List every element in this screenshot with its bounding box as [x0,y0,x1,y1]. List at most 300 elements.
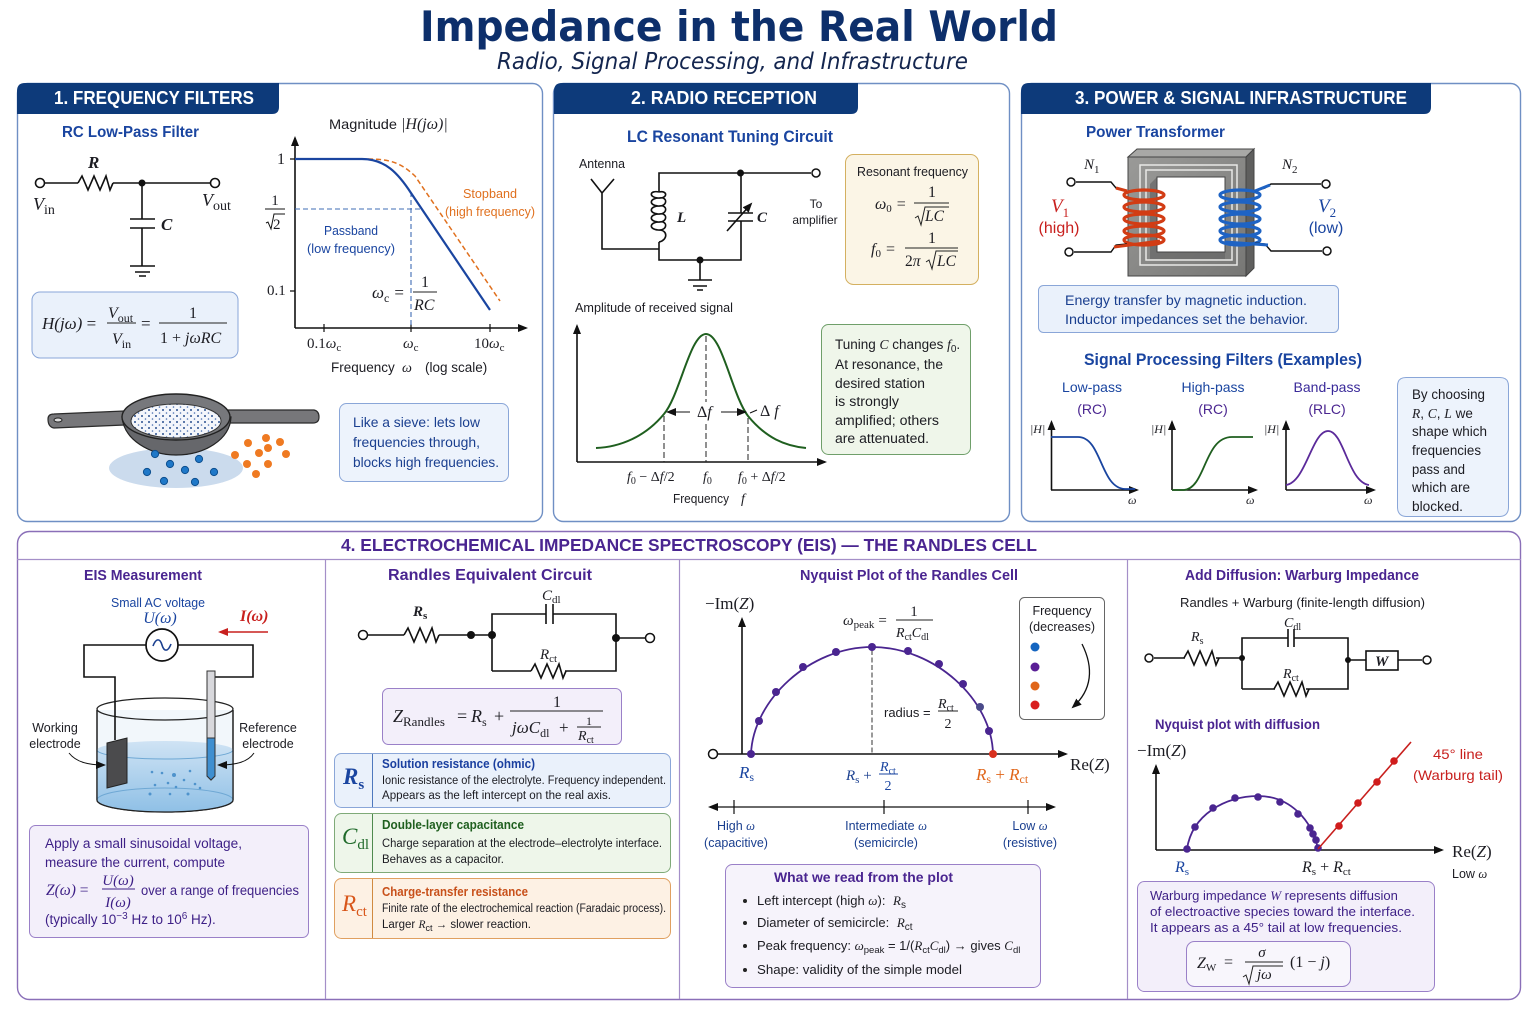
callout: tuning: desired station [835,376,925,391]
chart: Nyquist: s [986,772,991,786]
frequency axis annotation: High ω [717,819,755,833]
LC tuning circuit: L [676,210,686,226]
legend: frequency: Frequency [1032,604,1092,618]
diagram: electrochemical cell: electrode [29,737,81,751]
legend: frequency [1020,598,1104,720]
bode magnitude chart: 0.1 [267,283,286,299]
bode magnitude chart: c [414,342,419,354]
Randles plus Warburg circuit: s [1200,636,1204,647]
heading: EIS: 4. ELECTROCHEMICAL IMPEDANCE SPECTROSCOPY (EIS) — THE RANDLES CELL [341,535,1037,555]
RC circuit: C [161,215,173,234]
icon: transformer: 1 [1094,164,1100,176]
bode magnitude chart: RC [413,297,435,314]
chart: Nyquist: R [938,697,947,712]
callout: what we read from the plot: Shape: validity of the simple model [757,962,962,977]
bode magnitude chart: c [384,291,389,305]
diagram: electrochemical cell: U(ω) [143,610,177,627]
callout: what we read from the plot: peak [864,945,885,956]
callout: choosing R, C, L: By choosing [1412,387,1485,402]
formula: Z Randles: Randles [403,714,445,729]
diagram: electrochemical cell: Reference [239,721,297,735]
frequency axis annotation: Low ω [1012,819,1048,833]
chart: high-pass: |H| [1151,422,1166,436]
heading: signal processing filters: Signal Processing Filters (Examples) [1084,350,1362,369]
chart: Nyquist: −Im(Z) [705,594,754,613]
chart: Nyquist: s [749,770,754,784]
resonance chart: f [627,470,631,485]
icon: transformer: 2 [1330,205,1336,220]
callout: choosing R, C, L: frequencies [1412,443,1481,458]
card: charge-transfer resistance: ct [356,904,368,920]
bode magnitude chart: = [394,283,404,302]
diagram: electrochemical cell: electrode [242,737,294,751]
card: double-layer capacitance: Behaves as a capacitor. [382,854,504,866]
chart: Nyquist with diffusion: 45° line [1433,746,1483,762]
callout: EIS procedure: −3 [116,911,128,922]
Randles plus Warburg circuit: W [1375,654,1390,670]
callout: what we read from the plot: R [913,938,922,953]
callout: EIS procedure: measure the current, compute [45,855,225,870]
formula box: resonant frequency: 0 [875,248,881,260]
card: double-layer capacitance [334,814,670,872]
chart: Nyquist: s [855,774,859,786]
chart: Nyquist: radius = [884,705,931,720]
callout: choosing R, C, L: which are [1411,480,1470,495]
bode magnitude chart: c [336,342,341,354]
callout: EIS procedure: Z(ω) = [46,882,89,899]
bode magnitude chart: (low frequency) [307,241,395,256]
icon: transformer: (low) [1309,220,1343,237]
chart: Nyquist: 2 [884,779,892,794]
callout: choosing R, C, L [1398,378,1508,516]
formula box: resonant frequency: = [886,241,895,258]
callout: tuning: At resonance, the [835,357,943,372]
Randles plus Warburg circuit: ct [1292,673,1299,684]
formula: Warburg: W [1206,962,1217,974]
formula: Z Randles: 1 [553,694,561,711]
callout: tuning: are attenuated. [835,431,929,446]
callout: EIS procedure: over a range of frequencies [141,883,299,898]
resonance chart: f/2 [660,470,675,485]
diagram: electrochemical cell: Small AC voltage [111,596,205,610]
formula: Warburg [1186,942,1350,986]
chart: low-pass [1030,379,1137,507]
formula: Z Randles: = [457,706,467,726]
chart: band-pass: Band-pass [1294,379,1360,395]
bode magnitude chart: 0.1ω [307,336,336,352]
chart: Nyquist: = [878,613,887,629]
RC circuit: V [33,194,44,214]
sub-panel: Warburg: Add Diffusion: Warburg Impedance [1185,568,1419,584]
chart: band-pass: (RLC) [1308,401,1346,417]
transfer function formula: H(jω) = [41,314,96,333]
chart: low-pass: Low-pass [1062,379,1122,395]
header: frequency filters: 1. FREQUENCY FILTERS [54,88,254,108]
resonance chart: Δf [697,404,714,421]
diagram: electrochemical cell: I(ω) [239,608,268,625]
chart: Nyquist: ct [905,632,912,643]
transfer function formula: 1 [189,305,197,322]
formula box: resonant frequency: 2π [905,253,922,270]
icon: transformer: N [1282,157,1292,173]
callout: choosing R, C, L: shape which [1412,424,1487,439]
resonance chart [575,301,825,507]
formula box: resonant frequency: 1 [928,184,936,201]
resonance chart: f/2 [771,470,786,485]
sub-panel: Warburg [1137,568,1503,992]
chart: Nyquist with diffusion: s [1312,866,1316,878]
chart: Nyquist with diffusion: Low ω [1452,867,1487,881]
callout: EIS procedure [30,826,308,938]
frequency axis annotation: (capacitive) [704,836,768,850]
callout: magnetic induction [1038,286,1338,332]
header: radio reception [554,83,858,114]
card: charge-transfer resistance: ct [425,923,433,933]
chart: low-pass: (RC) [1077,401,1107,417]
subtitle: Radio, Signal Processing, and Infrastructure [497,49,968,75]
callout: EIS procedure: (typically 10 [45,912,116,927]
bode magnitude chart: ω [372,283,384,302]
Randles circuit diagram: ct [549,653,557,665]
callout: choosing R, C, L: R, C, L we [1411,406,1473,421]
chart: Nyquist with diffusion: s [1185,866,1189,878]
bode magnitude chart: (log scale) [425,360,487,375]
card: charge-transfer resistance: Larger R [382,919,425,931]
icon: transformer: (high) [1039,220,1079,237]
formula box: resonant frequency: Resonant frequency [857,165,969,179]
formula: Warburg: σ [1258,945,1266,961]
formula box: resonant frequency: = [897,196,906,213]
Randles plus Warburg circuit: C [1284,616,1293,631]
Randles plus Warburg circuit: R [1191,630,1200,645]
callout: what we read from the plot: Diameter of semicircle: R [757,915,905,930]
chart: high-pass [1151,379,1256,507]
card: solution resistance [334,754,670,808]
chart: Nyquist: ct [1020,772,1029,786]
sub-panel: Nyquist plot [704,568,1110,988]
card: charge-transfer resistance [334,878,670,938]
title: Impedance in the Real World [420,2,1058,51]
icon: transformer: V [1318,196,1330,217]
callout: what we read from the plot: dl [938,945,946,956]
callout: what we read from the plot: ) → gives [946,938,1004,953]
transfer function formula: out [118,311,134,325]
bode magnitude chart: ω [402,361,412,376]
callout: what we read from the plot: ct [922,945,930,956]
formula: Z Randles [382,688,622,746]
diagram: electrochemical cell [29,596,297,812]
chart: Nyquist: ct [947,703,954,714]
callout: tuning: Tuning C changes f [835,337,951,352]
panel: frequency filters [17,83,542,522]
resonance chart: 0 [742,476,747,487]
formula: Warburg: Z [1197,955,1206,972]
card: charge-transfer resistance: R [342,891,356,916]
formula: Z Randles: ct [587,735,594,746]
card: double-layer capacitance: C [342,824,357,849]
chart: Nyquist with diffusion: R [1302,859,1312,876]
card: charge-transfer resistance: → slower reaction. [432,919,531,931]
callout: EIS procedure: Apply a small sinusoidal voltage, [45,836,242,851]
panel: power and signal infrastructure [1021,83,1520,522]
chart: low-pass: |H| [1030,422,1045,436]
bode magnitude chart: (high frequency) [445,204,535,219]
bode magnitude chart: Magnitude [329,116,397,132]
card: solution resistance: s [358,777,364,793]
sub-panel: EIS measurement: EIS Measurement [84,568,202,584]
Randles plus Warburg circuit: dl [1293,622,1301,633]
chart: Nyquist: 1 [910,604,918,620]
callout: EIS procedure: Hz). [187,912,216,927]
resonance chart: 0 [707,476,712,487]
bode magnitude chart [265,116,535,376]
Randles circuit diagram: s [423,610,428,622]
formula: Warburg: = [1224,954,1233,971]
formula: Warburg: jω [1255,967,1272,983]
panel: radio reception [554,83,1010,522]
callout: what we read from the plot: C [930,938,939,953]
callout: tuning [822,324,970,454]
resonance chart: + Δ [747,470,771,485]
resonance chart: f [741,492,747,507]
formula: Warburg: (1 − j) [1290,954,1330,971]
icon: transformer [1039,149,1343,276]
card: double-layer capacitance: dl [357,837,369,853]
bode magnitude chart: 2 [273,217,280,233]
heading: power transformer: Power Transformer [1086,124,1225,141]
chart: Nyquist: C [912,626,922,641]
formula box: resonant frequency [846,154,978,284]
chart: high-pass: (RC) [1198,401,1228,417]
LC tuning circuit: amplifier [792,213,838,227]
callout: what we read from the plot: Left intercept (high ω): R [757,893,901,908]
callout: what we read from the plot: C [1004,938,1013,953]
transfer function formula: 1 + jωRC [160,330,222,347]
Randles circuit diagram [358,588,654,678]
chart: Nyquist with diffusion [1137,717,1503,881]
chart: Nyquist: 2 [944,717,952,732]
formula: Z Randles: + [494,706,504,726]
callout: what we read from the plot: dl [1013,945,1020,956]
RC circuit: R [87,153,99,172]
bode magnitude chart: 1 [277,151,285,168]
card: solution resistance: Solution resistance (ohmic) [382,757,535,771]
resonance chart: − Δ [636,470,660,485]
chart: Nyquist: R [1008,765,1020,784]
callout: choosing R, C, L: pass and [1412,462,1465,477]
callout: sieve analogy: Like a sieve: lets low [353,414,481,430]
card: charge-transfer resistance: Charge-transfer resistance [382,885,528,899]
chart: Nyquist with diffusion: Nyquist plot with diffusion [1155,717,1320,732]
formula box: resonant frequency: f [871,241,875,258]
legend: frequency: (decreases) [1029,620,1095,634]
callout: tuning: 0 [951,344,957,355]
diagram: electrochemical cell: Working [32,721,78,735]
resonance chart: Frequency [673,492,730,506]
formula box: resonant frequency: LC [936,253,957,270]
formula: Z Randles: s [482,715,487,729]
callout: tuning: amplified; others [835,413,939,428]
chart: band-pass [1264,379,1374,507]
callout: what we read from the plot [726,864,1040,988]
formula box: resonant frequency: ω [875,196,886,213]
card: double-layer capacitance: Charge separation at the electrode–electrolyte interface. [382,838,662,850]
chart: Nyquist with diffusion: Re(Z) [1452,842,1492,861]
chart: Nyquist: Re(Z) [1070,755,1110,774]
callout: Warburg impedance [1138,882,1434,992]
bode magnitude chart: |H(jω)| [401,116,448,133]
frequency axis annotation [704,800,1057,850]
Randles circuit diagram: R [413,604,423,620]
transfer function formula: V [108,305,118,322]
transfer function formula: = [141,314,151,333]
bode magnitude chart: Passband [324,223,378,238]
chart: Nyquist: R [739,763,749,782]
chart: Nyquist: ct [889,766,896,777]
LC tuning circuit [579,157,838,290]
header: radio reception: 2. RADIO RECEPTION [631,88,817,108]
callout: Warburg impedance: of electroactive species toward the interface. [1150,904,1415,919]
resonance chart: Δ f [760,403,781,420]
bode magnitude chart: Frequency [331,360,395,375]
callout: sieve analogy [340,404,508,482]
chart: Nyquist with diffusion: + [1316,859,1333,876]
bode magnitude chart: ω [403,336,414,352]
icon: sieve with particles [48,394,319,488]
Randles plus Warburg circuit [1145,595,1431,696]
header: frequency filters [17,83,279,114]
bode magnitude chart: 1 [271,193,279,209]
callout: what we read from the plot: s [901,900,906,911]
card: charge-transfer resistance: Finite rate of the electrochemical reaction (Faradaic process). [382,903,666,915]
formula: Z Randles: + [559,718,569,737]
chart: band-pass: |H| [1264,422,1279,436]
callout: sieve analogy: frequencies through, [353,434,480,450]
chart: Nyquist: R [976,765,986,784]
callout: EIS procedure: I(ω) [104,895,131,911]
chart: Nyquist: ω [843,613,854,629]
chart: Nyquist: + [991,765,1009,784]
chart: Nyquist: R [896,626,905,641]
callout: magnetic induction: Energy transfer by magnetic induction. [1065,292,1307,308]
sub-panel: Nyquist plot: Nyquist Plot of the Randles Cell [800,568,1018,584]
Randles plus Warburg circuit: Randles + Warburg (finite-length diffusion) [1180,595,1425,610]
card: solution resistance: R [343,764,358,789]
formula box: resonant frequency: 1 [928,230,936,247]
callout: choosing R, C, L: blocked. [1412,499,1463,514]
callout: sieve analogy: blocks high frequencies. [353,454,499,470]
frequency axis annotation: Intermediate ω [845,819,927,833]
frequency axis annotation: (resistive) [1003,836,1057,850]
card: solution resistance: Ionic resistance of the electrolyte. Frequency independent. [382,775,666,787]
chart: Nyquist with diffusion: ct [1343,866,1351,878]
heading: RC low-pass filter: RC Low-Pass Filter [62,124,199,141]
bode magnitude chart: c [500,342,505,354]
RC circuit: in [44,203,55,218]
callout: what we read from the plot: ct [905,922,913,933]
resonance chart: f [703,470,707,485]
frequency axis annotation: (semicircle) [854,836,918,850]
RC circuit: V [202,190,213,210]
formula: Z Randles: Z [393,706,403,726]
bode magnitude chart: Stopband [463,186,517,201]
icon: transformer: V [1051,196,1063,217]
formula: Z Randles: 1 [586,714,592,728]
chart: high-pass: High-pass [1181,379,1245,395]
formula: Z Randles: jωC [512,718,540,737]
header: power and signal infrastructure [1021,83,1431,114]
chart: band-pass: ω [1364,493,1372,507]
callout: tuning: . [956,337,960,352]
heading: LC tuning circuit: LC Resonant Tuning Circuit [627,128,833,146]
chart: low-pass: ω [1128,493,1136,507]
callout: Warburg impedance: Warburg impedance W represents diffusion [1150,888,1398,903]
RC circuit [33,153,231,276]
callout: Warburg impedance: It appears as a 45° tail at low frequencies. [1150,920,1402,935]
chart: Nyquist: dl [921,632,929,643]
chart: Nyquist with diffusion: R [1333,859,1343,876]
transfer function formula [32,292,238,358]
formula: Z Randles: R [578,729,587,744]
LC tuning circuit: C [757,210,768,226]
card: double-layer capacitance: Double-layer capacitance [382,818,524,832]
chart: Nyquist [705,594,1110,794]
sub-panel: Randles circuit [334,567,670,938]
panel: EIS [17,532,1521,1000]
callout: tuning: is strongly [835,394,899,409]
Randles circuit diagram: dl [552,594,561,606]
chart: high-pass: ω [1246,493,1254,507]
formula: Z Randles: dl [540,726,550,740]
callout: what we read from the plot: = 1/( [884,938,915,953]
LC tuning circuit: Antenna [579,157,625,171]
callout: EIS procedure: 6 [182,911,188,922]
formula box: resonant frequency: 0 [886,203,892,215]
chart: Nyquist with diffusion: (Warburg tail) [1413,767,1503,783]
resonance chart: 0 [631,476,636,487]
sub-panel: Randles circuit: Randles Equivalent Circuit [388,567,592,584]
callout: what we read from the plot: What we read from the plot [774,869,953,885]
icon: transformer: 2 [1292,164,1298,176]
transfer function formula: in [122,337,131,351]
Randles circuit diagram: R [540,647,549,663]
LC tuning circuit: To [810,197,823,211]
icon: transformer: 1 [1063,205,1069,220]
resonance chart: Amplitude of received signal [575,301,733,315]
callout: EIS procedure: U(ω) [102,873,134,889]
formula box: resonant frequency: LC [924,208,945,225]
sub-panel: EIS measurement [29,568,308,938]
bode magnitude chart: 10ω [474,336,500,352]
chart: Nyquist: R [846,768,855,784]
resonance chart: f [738,470,742,485]
Randles plus Warburg circuit: R [1283,667,1292,682]
Randles circuit diagram: C [542,588,552,604]
transfer function formula: V [112,331,122,348]
callout: magnetic induction: Inductor impedances set the behavior. [1065,311,1308,327]
chart: Nyquist: + [859,768,872,784]
card: solution resistance: Appears as the left intercept on the real axis. [382,790,611,802]
callout: what we read from the plot: Peak frequency: ω [757,938,864,953]
RC circuit: out [213,199,231,214]
bode magnitude chart: 1 [421,274,429,291]
icon: transformer: N [1084,157,1094,173]
chart: Nyquist: R [880,760,889,775]
chart: Nyquist with diffusion: R [1175,859,1185,876]
chart: Nyquist with diffusion: −Im(Z) [1137,741,1186,760]
chart: Nyquist: peak [854,619,875,631]
callout: EIS procedure: Hz to 10 [128,912,182,927]
